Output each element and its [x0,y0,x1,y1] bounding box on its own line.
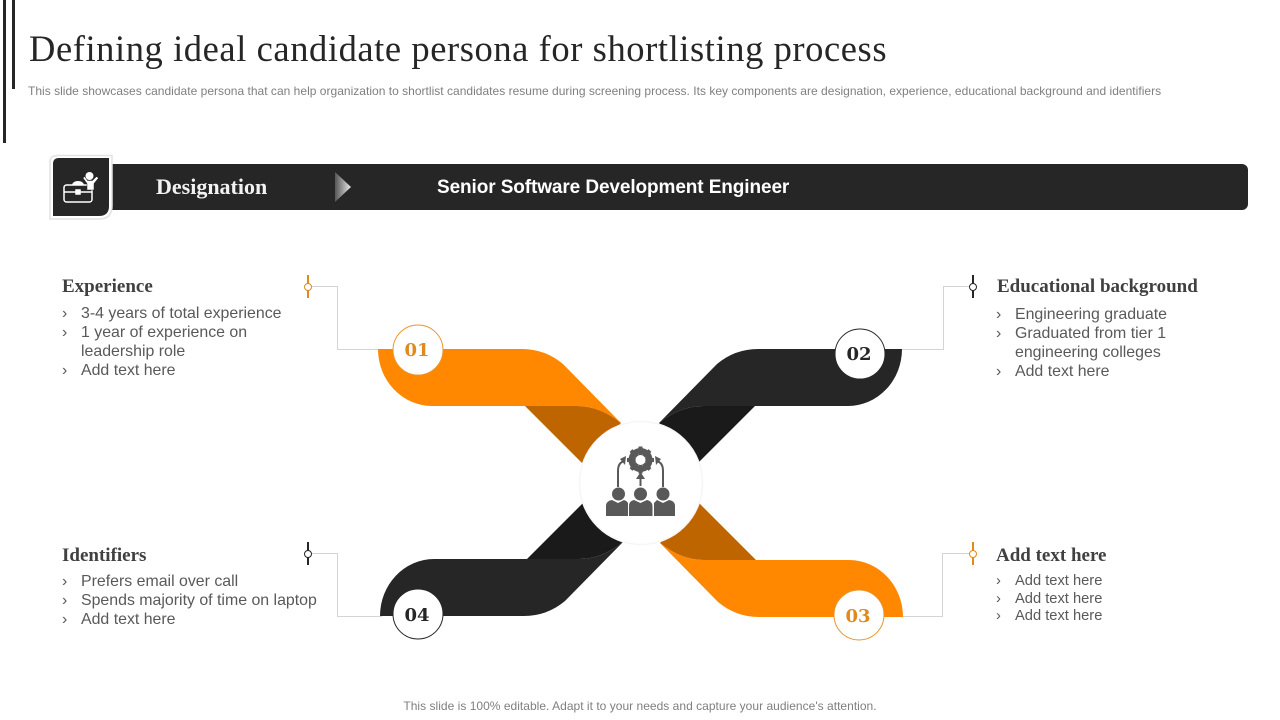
number badge 03 [834,590,884,640]
designation bar [108,164,1248,210]
list: educational background: engineering colleges [1015,344,1161,361]
list: experience: 1 year of experience on [81,324,247,341]
designation value: Senior Software Development Engineer [437,177,789,198]
list: educational background [996,306,1167,380]
marker 03 [970,542,976,565]
heading: educational background: Educational background [997,276,1198,297]
designation chevron arrow [335,172,351,202]
list: experience [62,305,282,379]
list: add text here: Add text here [1015,590,1102,606]
number badge 04: 04 [404,605,430,626]
list: educational background: Graduated from tier 1 [1015,325,1166,342]
list: add text here [996,573,1102,624]
subtitle: This slide showcases candidate persona that can help organization to shortlist candidates resume during screening process. Its key components are designation, experience, educational background and identifiers [28,84,1161,98]
title: Defining ideal candidate persona for shortlisting process [29,28,887,69]
connector 01 [308,286,380,350]
decorative title bar: short [12,0,15,89]
list: experience: 3-4 years of total experience [81,305,282,322]
decorative title bar: long [3,0,6,143]
list: identifiers: Add text here [81,611,176,628]
list: identifiers: Spends majority of time on laptop [81,592,317,609]
number badge 03: 03 [845,606,871,627]
list: identifiers: Prefers email over call [81,573,238,590]
marker 04 [304,542,312,565]
footer note: This slide is 100% editable. Adapt it to your needs and capture your audience's attention. [403,699,877,713]
number badge 02: 02 [846,344,872,365]
connector 02 [900,286,973,350]
list: add text here: Add text here [1015,573,1102,589]
number badge 01 [393,325,443,375]
heading: add text here: Add text here [996,545,1106,566]
ribbon 04 [380,502,623,616]
list: experience: leadership role [81,343,185,360]
ribbon 02 [659,349,902,463]
connector 04 [308,554,382,616]
list: experience: Add text here [81,362,176,379]
list: educational background: Engineering graduate [1015,306,1167,323]
icon: team with gear [606,446,675,516]
center circle [580,422,702,544]
icon: briefcase with person [49,154,113,220]
heading: identifiers: Identifiers [62,545,146,566]
list: identifiers [62,573,317,628]
ribbon 01 [378,349,621,463]
designation label: Designation [156,174,267,199]
number badge 02 [835,329,885,379]
list: add text here: Add text here [1015,608,1102,624]
connector 03 [902,554,973,616]
number badge 04 [393,589,443,639]
heading: experience: Experience [62,276,153,297]
list: educational background: Add text here [1015,363,1110,380]
ribbon 03 [660,503,903,617]
number badge 01: 01 [404,340,430,361]
marker 02 [970,275,976,298]
marker 01 [304,275,312,298]
